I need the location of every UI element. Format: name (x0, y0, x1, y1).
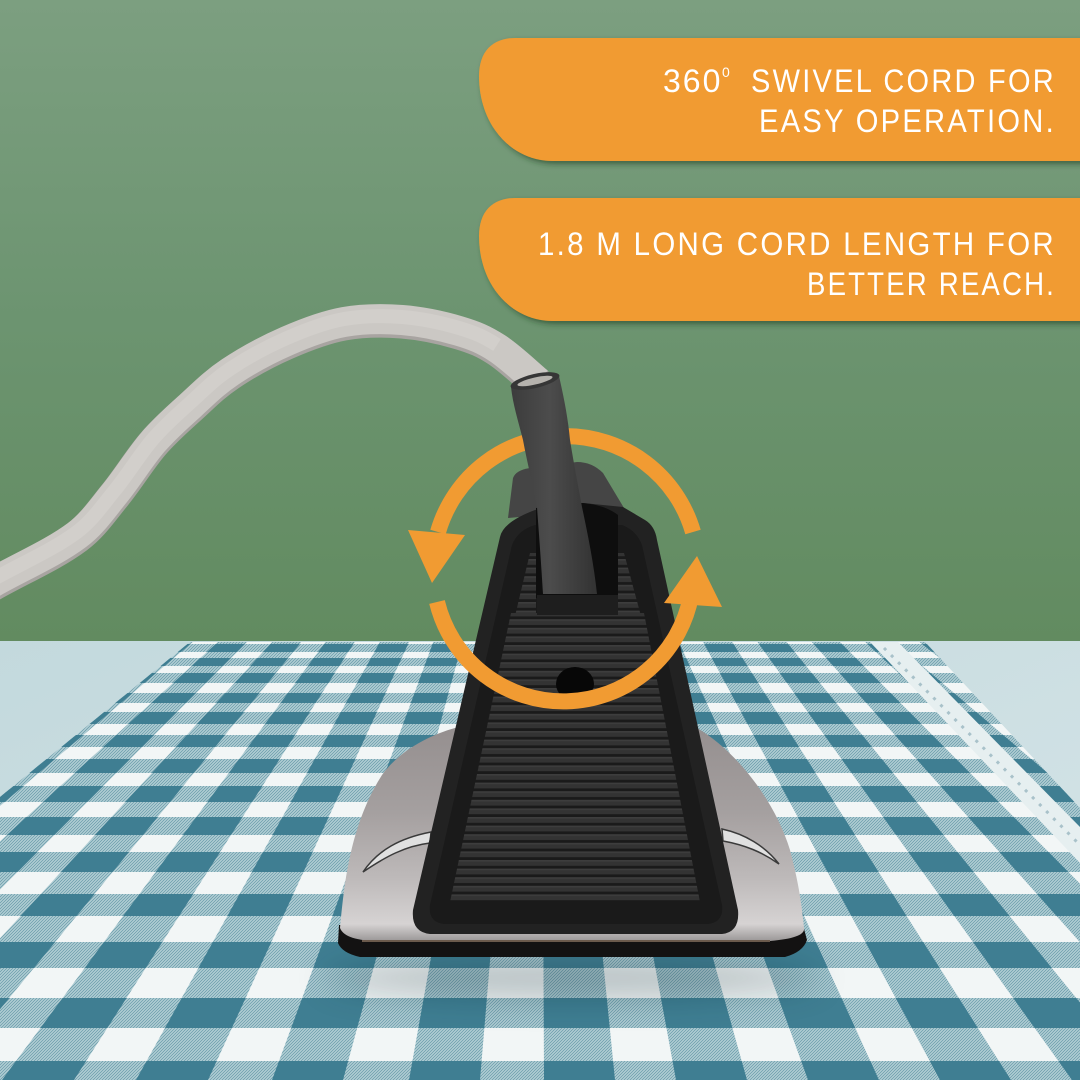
iron (338, 462, 807, 957)
background: green wall (0, 0, 1080, 642)
left arrowhead (408, 530, 465, 583)
power cord (0, 316, 538, 585)
left highlight (363, 832, 431, 872)
iron silver body (340, 728, 804, 941)
right upper ribs (618, 553, 641, 616)
callout text: SWIVEL CORD FOR (751, 63, 1056, 99)
callout text: 360 (663, 63, 722, 99)
handle cap (508, 462, 624, 518)
ribbed pad (450, 613, 700, 902)
right arrowhead (664, 556, 722, 607)
upper arc (438, 436, 693, 532)
gingham tablecloth (0, 640, 1080, 1080)
cord recess (536, 503, 618, 598)
right highlight (722, 829, 779, 864)
callout text (663, 63, 1056, 139)
cord socket block (537, 595, 618, 615)
callout text: EASY OPERATION. (759, 103, 1056, 139)
black handle (413, 503, 738, 934)
screw hole (556, 667, 594, 701)
background: wooden table (0, 641, 1080, 1080)
callout: cord length (479, 198, 1080, 321)
callout shape (479, 198, 1080, 321)
soleplate reflection (362, 940, 770, 942)
iron shadow on cloth (322, 956, 822, 1000)
iron soleplate (338, 925, 807, 957)
callout shape (479, 38, 1080, 161)
callout text: 0 (722, 64, 730, 80)
lower arc (437, 596, 691, 701)
icon: rotation arrows (408, 436, 722, 701)
left upper ribs (515, 553, 536, 616)
callout text (538, 226, 1056, 302)
cord sleeve (509, 369, 597, 594)
callout: swivel cord (479, 38, 1080, 161)
inner tray (430, 525, 722, 924)
